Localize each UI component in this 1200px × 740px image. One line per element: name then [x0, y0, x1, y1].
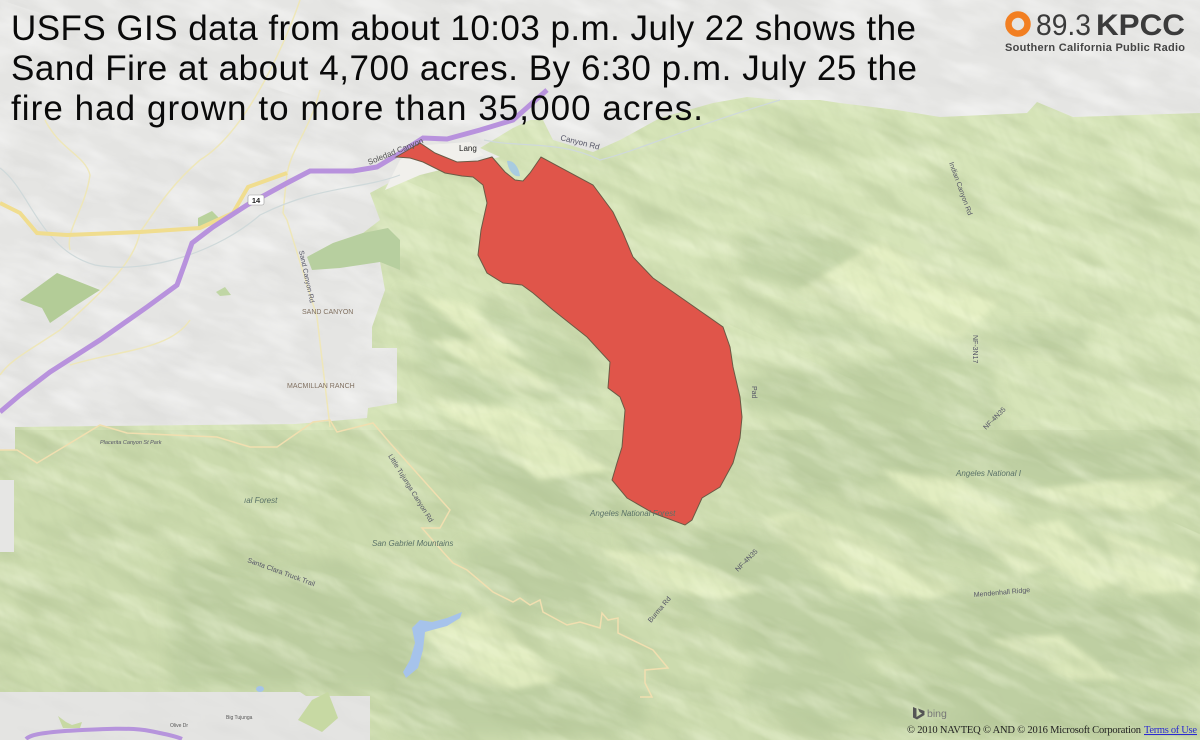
map labels: Little Tujunga Canyon Rd: [386, 453, 434, 524]
lake small: [256, 686, 264, 692]
highway shield: 14: 14: [252, 196, 261, 205]
minor roads: [0, 0, 330, 427]
Sand Fire perimeter: [396, 143, 742, 525]
map labels: Angeles National Forest: [589, 509, 676, 518]
map labels: [100, 133, 1030, 624]
tagline: Southern California Public Radio: [1005, 42, 1185, 54]
park: Hansen Dam: [298, 692, 338, 732]
map labels: NF-4N35: [982, 406, 1008, 431]
map labels: Indian Canyon Rd: [947, 161, 973, 216]
title: [11, 9, 917, 128]
Angeles National Forest backroad: [0, 420, 668, 697]
urban grey area south-west: [0, 686, 370, 740]
station frequency and name: KPCC: [1096, 9, 1185, 42]
map labels: MACMILLAN RANCH: [287, 383, 355, 390]
icon: orange ring: [1008, 14, 1028, 34]
map labels: Pad: [750, 386, 757, 399]
highway: purple SR-14: [0, 90, 547, 412]
map labels: NF-4N35: [734, 548, 760, 573]
highway 210: [26, 729, 182, 739]
map labels: Soledad Canyon: [366, 136, 425, 167]
title: USFS GIS data from about 10:03 p.m. July 22 shows the: [11, 9, 916, 48]
map labels: NF-3N17: [971, 335, 978, 364]
Bing logo: [913, 707, 947, 720]
highway shield: 14: [248, 195, 264, 205]
map labels: Burma Rd: [647, 596, 673, 624]
map labels: Placerita Canyon St Park: [100, 440, 162, 446]
station frequency and name: 89.3: [1036, 9, 1091, 42]
parks and green patches: [20, 211, 400, 323]
terrain: light ridge slopes: [420, 240, 1200, 690]
title: fire had grown to more than 35,000 acres.: [11, 89, 703, 128]
map labels: Mendenhall Ridge: [974, 587, 1030, 599]
urban grey area north and west: [0, 0, 1200, 552]
station frequency and name: [1036, 9, 1185, 42]
map labels: Lang: [459, 144, 477, 153]
urban grey area south-west: Big Tujunga: [226, 715, 253, 721]
map labels: Sand Canyon Rd: [297, 250, 315, 304]
attribution: © 2010 NAVTEQ © AND © 2016 Microsoft Corporation: [907, 725, 1142, 736]
highway: yellow Soledad Canyon Rd: [0, 173, 287, 235]
map labels: Santa Clara Truck Trail: [246, 557, 316, 588]
map labels: San Gabriel Mountains: [372, 539, 453, 548]
map labels: SAND CANYON: [302, 309, 353, 316]
grey patch west edge: [0, 480, 14, 552]
urban grey area south-west: Olive Dr: [170, 723, 188, 729]
river and creek lines: [0, 100, 780, 267]
map labels: Canyon Rd: [560, 133, 601, 152]
Bing logo: bing: [927, 708, 947, 720]
small lake near Lang: [507, 161, 520, 176]
terrain: dark ridge shadows: [170, 225, 1200, 735]
pale valley around Lang: [385, 142, 484, 190]
title: Sand Fire at about 4,700 acres. By 6:30 p.m. July 25 the: [11, 49, 917, 88]
attribution: Terms of Use: [1144, 725, 1197, 736]
map labels: Angeles National I: [955, 469, 1022, 478]
logo: 89.3 KPCC: [1005, 9, 1185, 54]
map labels: ıal Forest: [244, 496, 278, 505]
Reservoir: Big Tujunga: [403, 612, 462, 678]
